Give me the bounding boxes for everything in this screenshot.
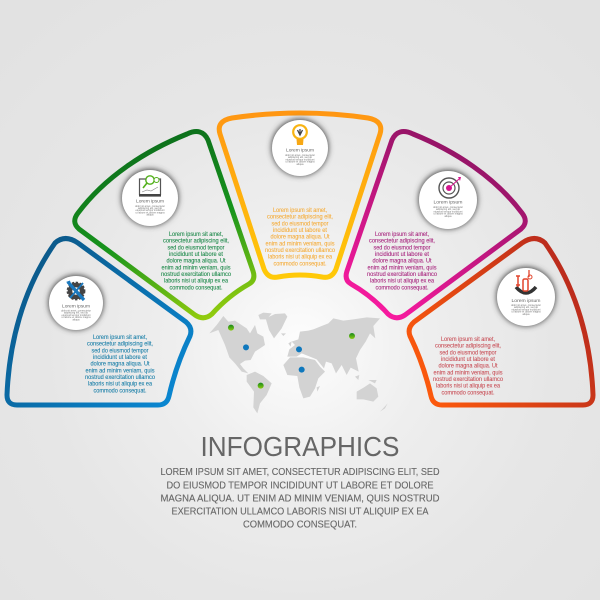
circle badge: red panel: ut labore et dolore magna xyxy=(512,311,541,314)
map pins xyxy=(228,325,355,389)
blue panel text: commodo consequat. xyxy=(94,387,147,394)
circle badge: yellow panel: Lorem ipsum xyxy=(286,148,314,154)
circle badge: green panel: Lorem ipsum xyxy=(136,198,164,204)
icon: gears and tools xyxy=(516,270,536,293)
description text xyxy=(160,467,440,530)
circle badge: red panel: aliqua xyxy=(522,314,530,316)
blue panel text: enim ad minim veniam, quis xyxy=(86,367,155,374)
red panel text: commodo consequat. xyxy=(442,389,495,396)
circle badge: blue panel: adipiscing elit, sed do xyxy=(64,312,89,315)
circle badge: yellow panel: aliqua xyxy=(296,164,304,166)
blue panel text: dolore magna aliqua. Ut xyxy=(90,361,150,368)
description text: MAGNA ALIQUA. UT ENIM AD MINIM VENIAM, QUIS NOSTRUD xyxy=(160,494,440,505)
circle badge: yellow panel: dolor sit amet, consectetur xyxy=(285,154,315,157)
red panel text: consectetur adipiscing elit, xyxy=(435,343,501,350)
yellow panel outline xyxy=(219,113,381,277)
panel: green xyxy=(75,132,254,318)
circle badge: blue panel: Lorem ipsum xyxy=(62,304,90,310)
red panel text xyxy=(433,336,503,396)
pink panel text: sed do eiusmod tempor xyxy=(374,244,431,251)
title: INFOGRAPHICS xyxy=(200,431,400,462)
red panel text: sed do eiusmod tempor xyxy=(440,349,497,356)
circle badge: red panel: eiusmod tempor incididunt xyxy=(512,308,541,311)
red panel outline xyxy=(409,238,593,405)
red panel text: Lorem ipsum sit amet, xyxy=(441,336,495,343)
circle badge: pink panel: eiusmod tempor incididunt xyxy=(434,210,463,213)
red panel text: nostrud exercitation ullamco xyxy=(433,376,503,383)
circle badge: green panel: aliqua xyxy=(146,215,154,217)
pink panel text: Lorem ipsum sit amet, xyxy=(375,231,429,238)
description text: LOREM IPSUM SIT AMET, CONSECTETUR ADIPISCING ELIT, SED xyxy=(160,467,440,478)
icon: target with arrow xyxy=(439,177,461,198)
circle badge: green panel: ut labore et dolore magna xyxy=(136,211,165,214)
yellow panel text xyxy=(265,207,335,267)
yellow panel text: commodo consequat. xyxy=(274,260,327,267)
red panel text: dolore magna aliqua. Ut xyxy=(438,363,498,370)
panel: pink xyxy=(346,132,525,318)
pink panel text: consectetur adipiscing elit, xyxy=(369,238,435,245)
circle badge: pink panel: dolor sit amet, consectetur xyxy=(433,206,463,209)
description text: COMMODO CONSEQUAT. xyxy=(243,520,357,530)
circle badge: red panel: Lorem ipsum xyxy=(512,298,540,304)
pink panel text: dolore magna aliqua. Ut xyxy=(372,258,432,265)
blue panel text xyxy=(85,334,155,394)
panel: red xyxy=(409,238,593,405)
description text: EXERCITATION ULLAMCO LABORIS NISI UT ALIQUIP EX EA xyxy=(172,507,429,518)
circle badge: blue panel: dolor sit amet, consectetur xyxy=(61,310,91,312)
green panel text: consectetur adipiscing elit, xyxy=(163,238,229,245)
circle badge: green panel: dolor sit amet, consectetur xyxy=(135,205,165,208)
yellow panel text: consectetur adipiscing elit, xyxy=(267,214,333,221)
green panel text: sed do eiusmod tempor xyxy=(168,244,225,251)
green panel text xyxy=(161,231,231,291)
circle badge: pink panel xyxy=(418,170,478,229)
red panel text: enim ad minim veniam, quis xyxy=(434,369,503,376)
circle badge: yellow panel: ut labore et dolore magna xyxy=(286,161,315,164)
green panel text: nostrud exercitation ullamco xyxy=(161,271,231,278)
red panel text: incididunt ut labore et xyxy=(441,356,495,363)
circle badge: green panel: adipiscing elit, sed do xyxy=(138,207,163,210)
pink panel text: nostrud exercitation ullamco xyxy=(367,271,437,278)
green panel text: incididunt ut labore et xyxy=(169,251,223,258)
blue panel text: nostrud exercitation ullamco xyxy=(85,374,155,381)
circle badge: pink panel: ut labore et dolore magna xyxy=(434,213,463,216)
circle badge: blue panel: aliqua xyxy=(72,319,80,321)
world map xyxy=(209,313,388,413)
circle badge: red panel xyxy=(496,267,556,326)
green panel outline xyxy=(75,132,254,318)
yellow panel text: sed do eiusmod tempor xyxy=(272,220,329,227)
icon: laptop with magnifier xyxy=(139,176,161,197)
panel: blue xyxy=(7,238,191,405)
circle badge: yellow panel: adipiscing elit, sed do xyxy=(288,156,313,159)
circle badge: pink panel: adipiscing elit, sed do xyxy=(436,208,461,211)
pink panel text: incididunt ut labore et xyxy=(375,251,429,258)
circle badge: yellow panel xyxy=(272,119,328,176)
icon: light bulb xyxy=(293,125,307,145)
blue panel text: Lorem ipsum sit amet, xyxy=(93,334,147,341)
red panel text: laboris nisi ut aliquip ex ea xyxy=(436,383,500,390)
green panel text: commodo consequat. xyxy=(170,284,223,291)
pink panel text: commodo consequat. xyxy=(376,284,429,291)
blue panel outline xyxy=(7,238,191,405)
blue panel text: laboris nisi ut aliquip ex ea xyxy=(88,381,152,388)
yellow panel text: incididunt ut labore et xyxy=(273,227,327,234)
green panel text: dolore magna aliqua. Ut xyxy=(166,258,226,265)
panel: yellow xyxy=(219,113,381,277)
circle badge: blue panel xyxy=(48,275,104,330)
blue panel text: incididunt ut labore et xyxy=(93,354,147,361)
blue panel text: consectetur adipiscing elit, xyxy=(87,341,153,348)
circle badge: pink panel: aliqua xyxy=(444,216,452,218)
green panel text: Lorem ipsum sit amet, xyxy=(169,231,223,238)
circle badge: pink panel: Lorem ipsum xyxy=(434,200,462,206)
circle badge: yellow panel: eiusmod tempor incididunt xyxy=(286,158,315,161)
green panel text: laboris nisi ut aliquip ex ea xyxy=(164,278,228,285)
pink panel text: enim ad minim veniam, quis xyxy=(368,264,437,271)
circle badge: blue panel: ut labore et dolore magna xyxy=(62,316,91,319)
yellow panel text: Lorem ipsum sit amet, xyxy=(273,207,327,214)
yellow panel text: dolore magna aliqua. Ut xyxy=(270,234,330,241)
blue panel text: sed do eiusmod tempor xyxy=(92,347,149,354)
circle badge: blue panel: eiusmod tempor incididunt xyxy=(62,314,91,317)
description text: DO EIUSMOD TEMPOR INCIDIDUNT UT LABORE ET DOLORE xyxy=(166,480,434,491)
pink panel outline xyxy=(346,132,525,318)
circle badge: red panel: adipiscing elit, sed do xyxy=(514,306,539,309)
green panel text: enim ad minim veniam, quis xyxy=(162,264,231,271)
yellow panel text: nostrud exercitation ullamco xyxy=(265,247,335,254)
pink panel text xyxy=(367,231,437,291)
circle badge: red panel: dolor sit amet, consectetur xyxy=(511,304,541,307)
icon: gear and wrench xyxy=(66,280,85,300)
pink panel text: laboris nisi ut aliquip ex ea xyxy=(370,278,434,285)
yellow panel text: laboris nisi ut aliquip ex ea xyxy=(268,254,332,261)
circle badge: green panel xyxy=(122,169,178,226)
yellow panel text: enim ad minim veniam, quis xyxy=(266,240,335,247)
circle badge: green panel: eiusmod tempor incididunt xyxy=(136,209,165,212)
